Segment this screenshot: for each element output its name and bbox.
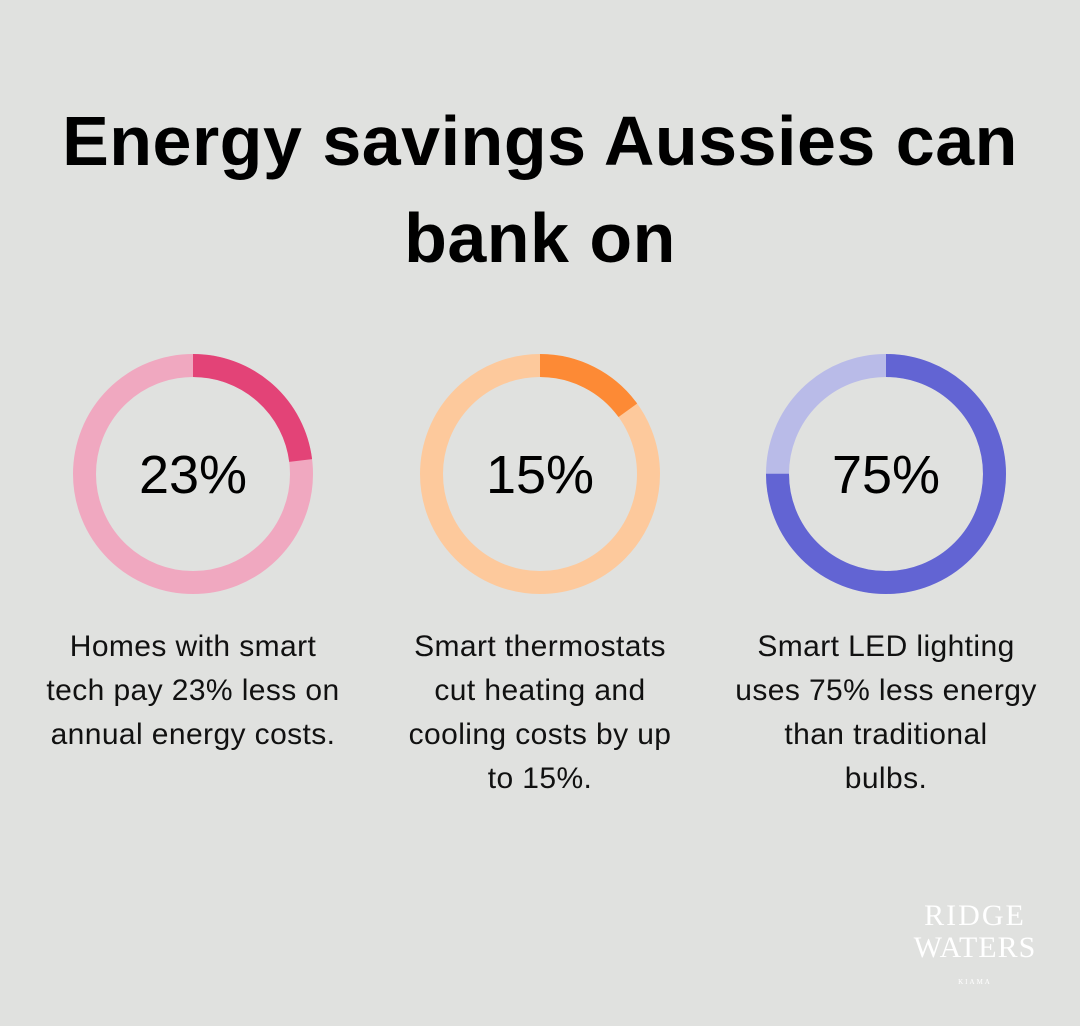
caption: 75% [735, 630, 1037, 795]
logo: KIAMA [958, 978, 992, 986]
caption: 23%: Homes with smart [70, 630, 316, 663]
caption: 15%: Smart thermostats [414, 630, 666, 663]
caption: 15%: cut heating and [434, 674, 646, 707]
caption: 23% [46, 630, 340, 751]
title [62, 102, 1018, 277]
caption: 15% [409, 630, 671, 795]
caption: 75%: uses 75% less energy [735, 674, 1037, 707]
caption: 23%: annual energy costs. [51, 718, 335, 751]
donut: 15%: 15% [486, 445, 594, 505]
caption: 15%: cooling costs by up [409, 718, 671, 751]
logo: WATERS [914, 931, 1036, 964]
caption: 75%: bulbs. [845, 762, 927, 795]
title: bank on [404, 199, 676, 277]
donut: 23%: 23% [139, 445, 247, 505]
donut: 75%: 75% [832, 445, 940, 505]
caption: 75%: than traditional [784, 718, 988, 751]
donut: 23% [84, 366, 302, 582]
title: Energy savings Aussies can [62, 102, 1018, 180]
donut: 15% [432, 366, 648, 582]
caption: 15%: to 15%. [488, 762, 592, 795]
caption: 23%: tech pay 23% less on [46, 674, 340, 707]
caption: 75%: Smart LED lighting [757, 630, 1015, 663]
donut: 75% [778, 366, 994, 582]
logo: RIDGE [924, 899, 1026, 932]
logo [914, 899, 1036, 986]
